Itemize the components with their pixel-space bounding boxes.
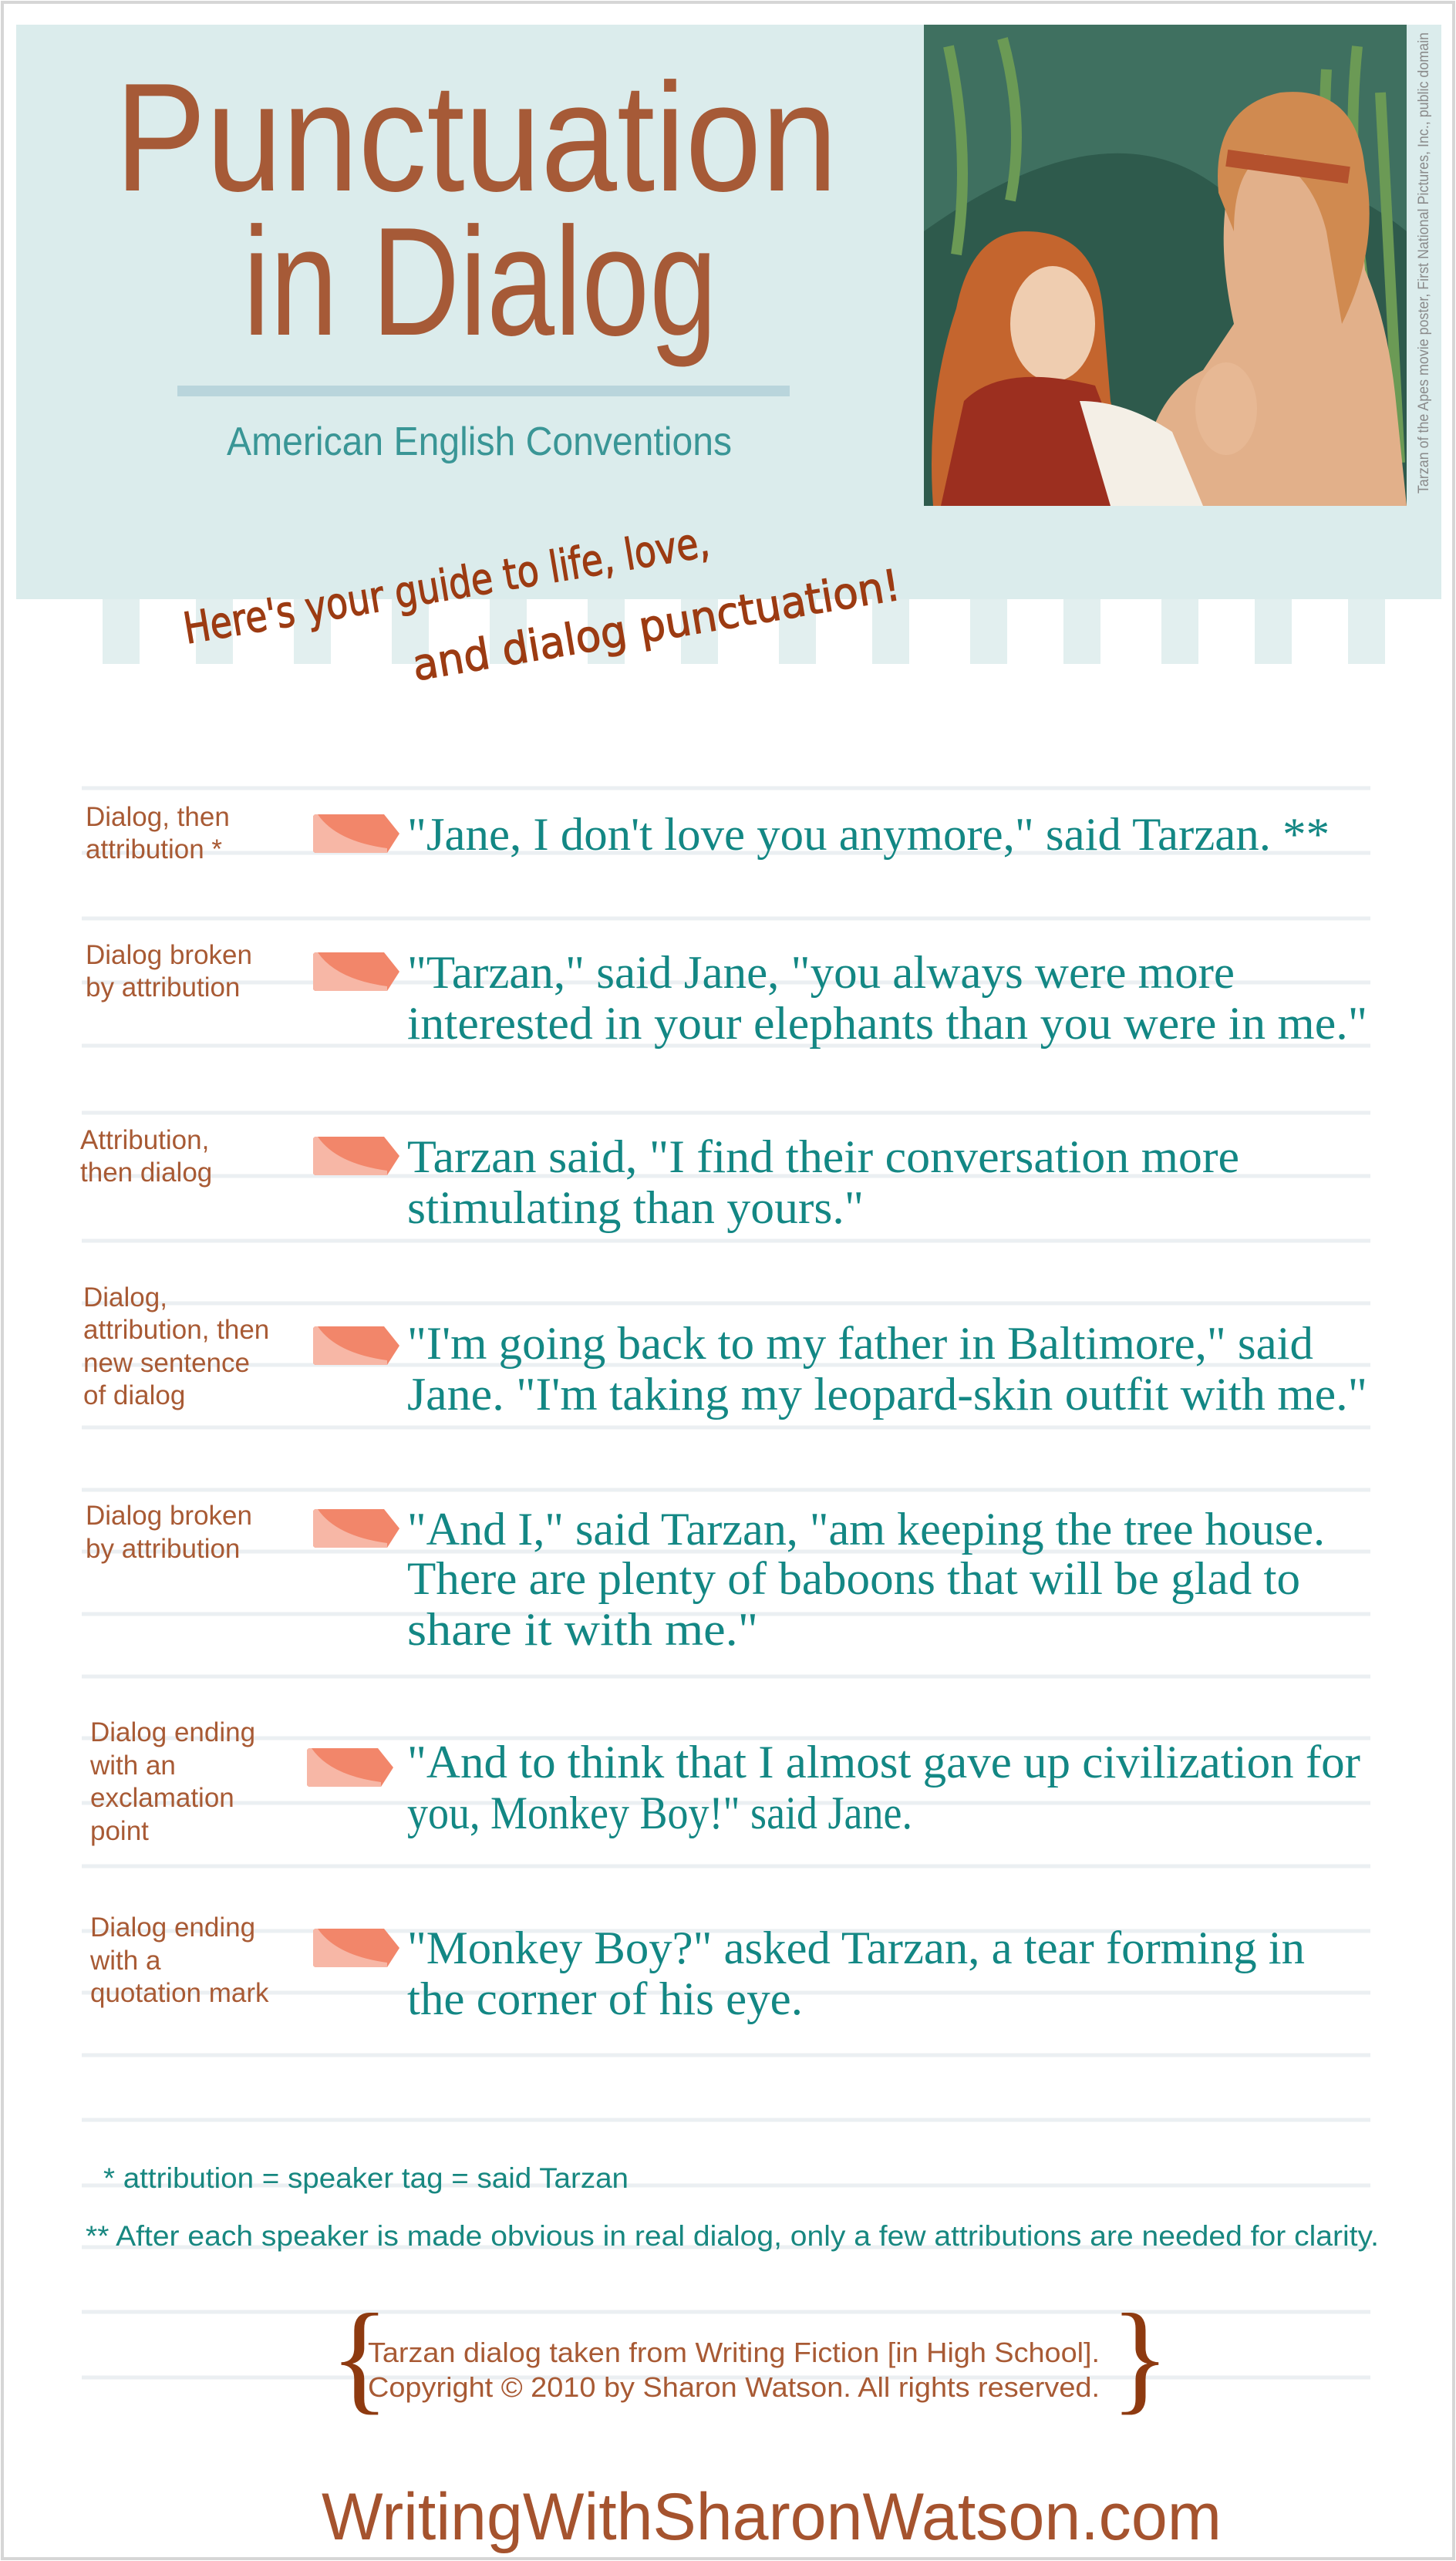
- row 2: dialog broken by attribution: by attribution: [86, 972, 240, 1002]
- row 4: dialog, attribution, new sentence: "I'm going back to my father in Baltimore," said: [407, 1318, 1313, 1369]
- image credit: Tarzan of the Apes movie poster, First National Pictures, Inc., public domain: [1416, 32, 1432, 494]
- image: Tarzan movie poster: [924, 25, 1407, 506]
- title underline bar: [177, 386, 790, 396]
- row 6: exclamation point: "And to think that I almost gave up civilization for: [407, 1737, 1360, 1788]
- subtitle: American English Conventions: [227, 420, 732, 464]
- copyright credit with braces: Tarzan dialog taken from Writing Fiction [in High School].: [368, 2337, 1100, 2368]
- row 6: exclamation point: with an: [89, 1751, 176, 1781]
- tagline: [180, 517, 904, 691]
- copyright credit with braces: }: [1111, 2288, 1170, 2425]
- row 5: dialog broken by attribution: There are plenty of baboons that will be glad to: [407, 1553, 1300, 1604]
- row 2: dialog broken by attribution: [86, 940, 1367, 1049]
- row 7: quotation mark: with a: [89, 1946, 161, 1976]
- man: [1141, 99, 1407, 506]
- row 7: quotation mark: [89, 1912, 1305, 2024]
- row 5: dialog broken by attribution: "And I," said Tarzan, "am keeping the tree house.: [407, 1504, 1325, 1555]
- woman: [932, 231, 1121, 506]
- row 1: dialog then attribution: [86, 802, 1330, 864]
- copyright credit with braces: [330, 2288, 1170, 2425]
- header panel: [16, 25, 1441, 664]
- row 4: dialog, attribution, new sentence: Dialog,: [83, 1282, 167, 1313]
- row 5: dialog broken by attribution: [86, 1501, 1325, 1655]
- row 3: attribution then dialog: Attribution,: [80, 1125, 209, 1155]
- row 5: dialog broken by attribution: Dialog broken: [86, 1501, 252, 1531]
- row 1: dialog then attribution: "Jane, I don't love you anymore," said Tarzan. **: [407, 809, 1330, 860]
- row 7: quotation mark: quotation mark: [90, 1978, 269, 2008]
- row 3: attribution then dialog: Tarzan said, "I find their conversation more: [407, 1131, 1239, 1182]
- copyright credit with braces: Copyright © 2010 by Sharon Watson. All rights reserved.: [368, 2371, 1100, 2403]
- row 6: exclamation point: exclamation: [90, 1783, 234, 1813]
- row 3: attribution then dialog: [80, 1125, 1239, 1233]
- title: in Dialog: [243, 196, 717, 368]
- row 3: attribution then dialog: then dialog: [80, 1158, 212, 1188]
- row 6: exclamation point: you, Monkey Boy!" said Jane.: [407, 1788, 912, 1838]
- row 5: dialog broken by attribution: by attribution: [86, 1534, 240, 1564]
- tagline: and dialog punctuation!: [409, 561, 904, 691]
- row 5: dialog broken by attribution: share it with me.": [407, 1604, 758, 1655]
- row 3: attribution then dialog: stimulating than yours.": [407, 1182, 864, 1233]
- row 4: dialog, attribution, new sentence: [83, 1282, 1367, 1420]
- row 1: dialog then attribution: Dialog, then: [86, 802, 230, 832]
- footnote 1: * attribution = speaker tag = said Tarzan: [103, 2162, 629, 2194]
- title: Punctuation: [115, 52, 838, 224]
- website URL: WritingWithSharonWatson.com: [322, 2480, 1222, 2554]
- row 1: dialog then attribution: attribution *: [86, 834, 222, 864]
- row 2: dialog broken by attribution: interested in your elephants than you were in me.": [407, 998, 1367, 1049]
- title: [115, 52, 838, 368]
- row 6: exclamation point: Dialog ending: [90, 1717, 255, 1747]
- row 2: dialog broken by attribution: Dialog broken: [86, 940, 252, 970]
- row 4: dialog, attribution, new sentence: Jane. "I'm taking my leopard-skin outfit with me.": [407, 1369, 1367, 1420]
- row 4: dialog, attribution, new sentence: of dialog: [83, 1380, 185, 1410]
- row 4: dialog, attribution, new sentence: new sentence: [83, 1348, 250, 1378]
- row 7: quotation mark: the corner of his eye.: [407, 1973, 803, 2024]
- row 7: quotation mark: Dialog ending: [90, 1912, 255, 1943]
- row 6: exclamation point: point: [90, 1816, 149, 1846]
- row 2: dialog broken by attribution: "Tarzan," said Jane, "you always were more: [407, 947, 1235, 998]
- row 7: quotation mark: "Monkey Boy?" asked Tarzan, a tear forming in: [407, 1922, 1305, 1973]
- row 4: dialog, attribution, new sentence: attribution, then: [83, 1315, 269, 1345]
- copyright credit with braces: {: [330, 2288, 389, 2425]
- footnote 2: ** After each speaker is made obvious in real dialog, only a few attributions are needed for clarity.: [86, 2220, 1379, 2252]
- tagline: Here's your guide to life, love,: [180, 517, 713, 655]
- row 6: exclamation point: [89, 1717, 1360, 1846]
